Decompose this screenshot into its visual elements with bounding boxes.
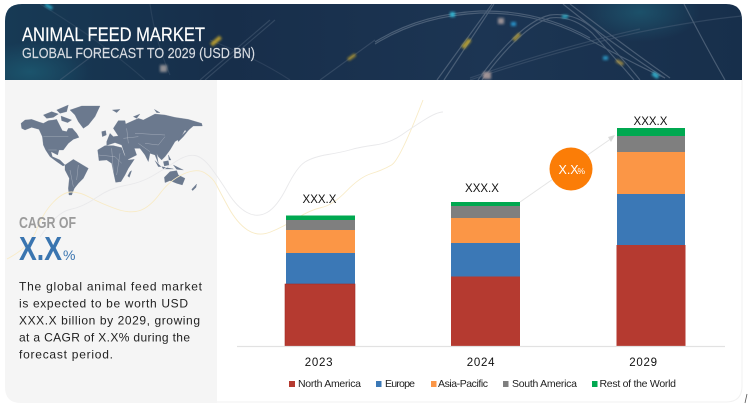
text block: market description: forecast period. <box>19 348 113 362</box>
bar: 2023 <box>285 216 355 346</box>
bar: 2029 <box>616 128 686 346</box>
growth arrow <box>520 135 615 202</box>
outer card border <box>217 80 742 402</box>
bar value labels: XXX.X <box>303 194 337 206</box>
text block: market description <box>19 280 203 362</box>
legend: Europe <box>385 378 415 390</box>
x axis labels: 2029 <box>629 357 658 369</box>
callout: growth rate: X.X <box>558 163 579 177</box>
legend: Asia-Pacific <box>438 378 488 390</box>
title: ANIMAL FEED MARKET <box>22 24 205 46</box>
value: CAGR X.X%: X.X <box>19 230 62 267</box>
legend <box>289 378 676 390</box>
header banner <box>5 4 742 80</box>
legend: North America <box>298 378 361 390</box>
text block: market description: XXX.X billion by 2029, growing <box>19 314 200 328</box>
x axis labels: 2023 <box>305 357 333 369</box>
icon: world map <box>21 105 202 195</box>
decorative curves <box>7 100 443 259</box>
x axis labels: 2024 <box>467 357 495 369</box>
text block: market description: at a CAGR of X.X% during the <box>19 330 190 344</box>
text block: market description: The global animal feed market <box>19 280 203 294</box>
x axis line <box>237 346 725 348</box>
value: CAGR X.X%: % <box>63 247 75 263</box>
callout: growth rate: % <box>578 166 586 176</box>
bar: 2024 <box>451 202 520 346</box>
text block: market description: is expected to be worth USD <box>19 296 188 310</box>
legend: Rest of the World <box>600 378 676 390</box>
bar value labels <box>303 116 668 206</box>
callout: growth rate <box>550 148 592 190</box>
x axis labels <box>305 357 658 369</box>
legend: South America <box>512 378 577 390</box>
bar value labels: XXX.X <box>465 183 499 195</box>
label: CAGR of: CAGR OF <box>19 215 76 232</box>
bar value labels: XXX.X <box>634 116 668 128</box>
panel: market summary background <box>5 80 217 403</box>
corner mark <box>745 394 747 403</box>
subtitle: GLOBAL FORECAST TO 2029 (USD BN) <box>22 45 255 62</box>
